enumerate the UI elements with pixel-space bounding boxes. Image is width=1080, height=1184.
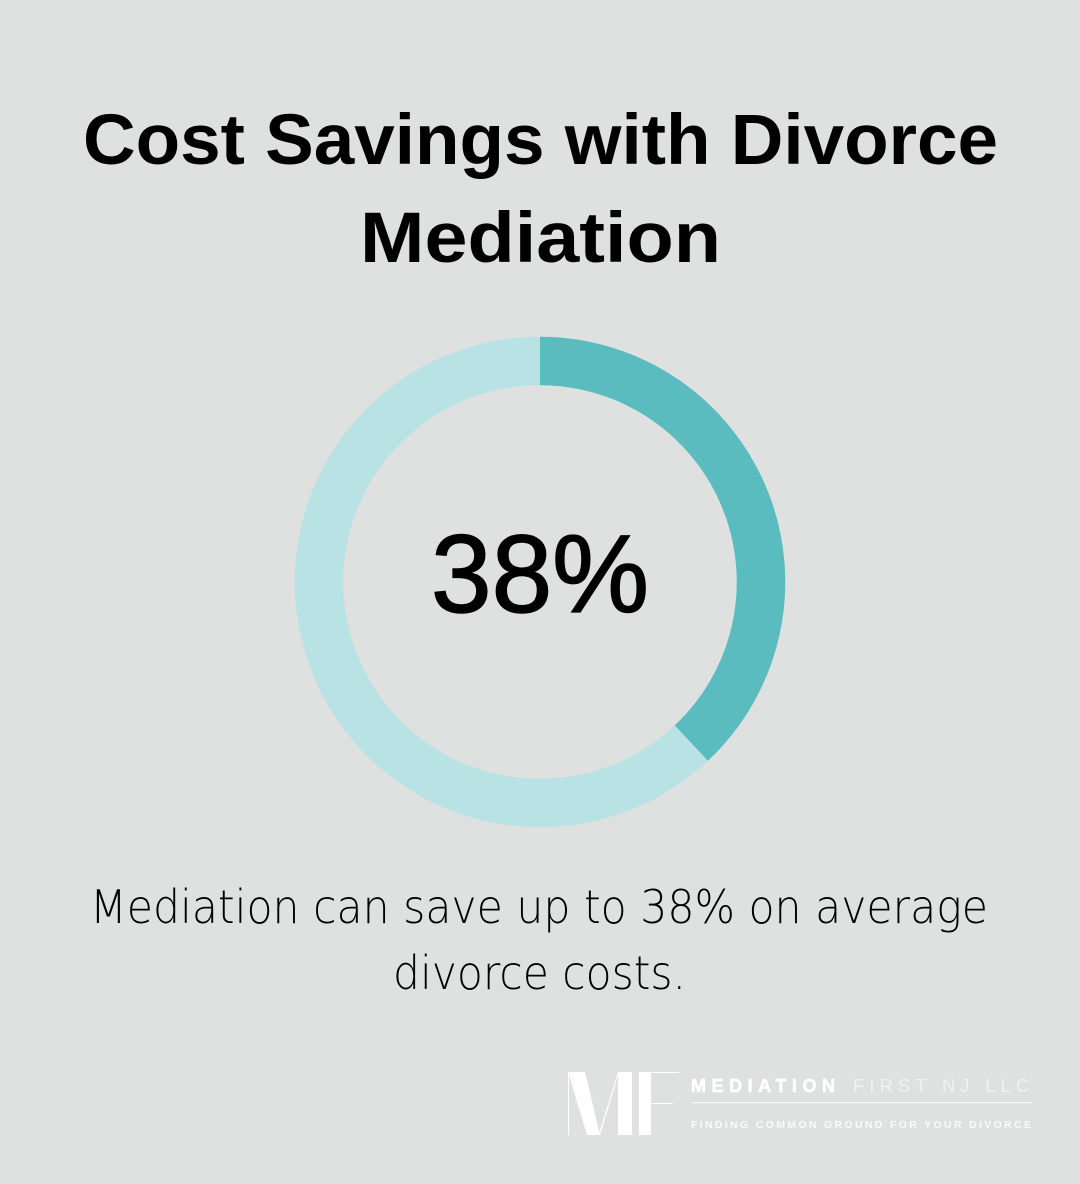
center value: 38% [431, 513, 649, 636]
title [83, 101, 998, 278]
donut chart: 38% [319, 361, 761, 803]
logo [568, 1072, 1032, 1135]
chart track [319, 361, 761, 803]
description [90, 880, 988, 1000]
logo tagline: FINDING COMMON GROUND FOR YOUR DIVORCE [691, 1119, 1031, 1131]
logo mark: MF [568, 1072, 679, 1135]
logo name: MEDIATION [691, 1076, 835, 1096]
description: Mediation can save up to 38% on average [90, 880, 988, 934]
chart highlighted arc [540, 361, 761, 743]
title: Cost Savings with Divorce [83, 101, 998, 180]
logo: FIRST NJ LLC [853, 1076, 1029, 1096]
title: Mediation [360, 199, 721, 278]
description: divorce costs. [393, 946, 686, 1000]
